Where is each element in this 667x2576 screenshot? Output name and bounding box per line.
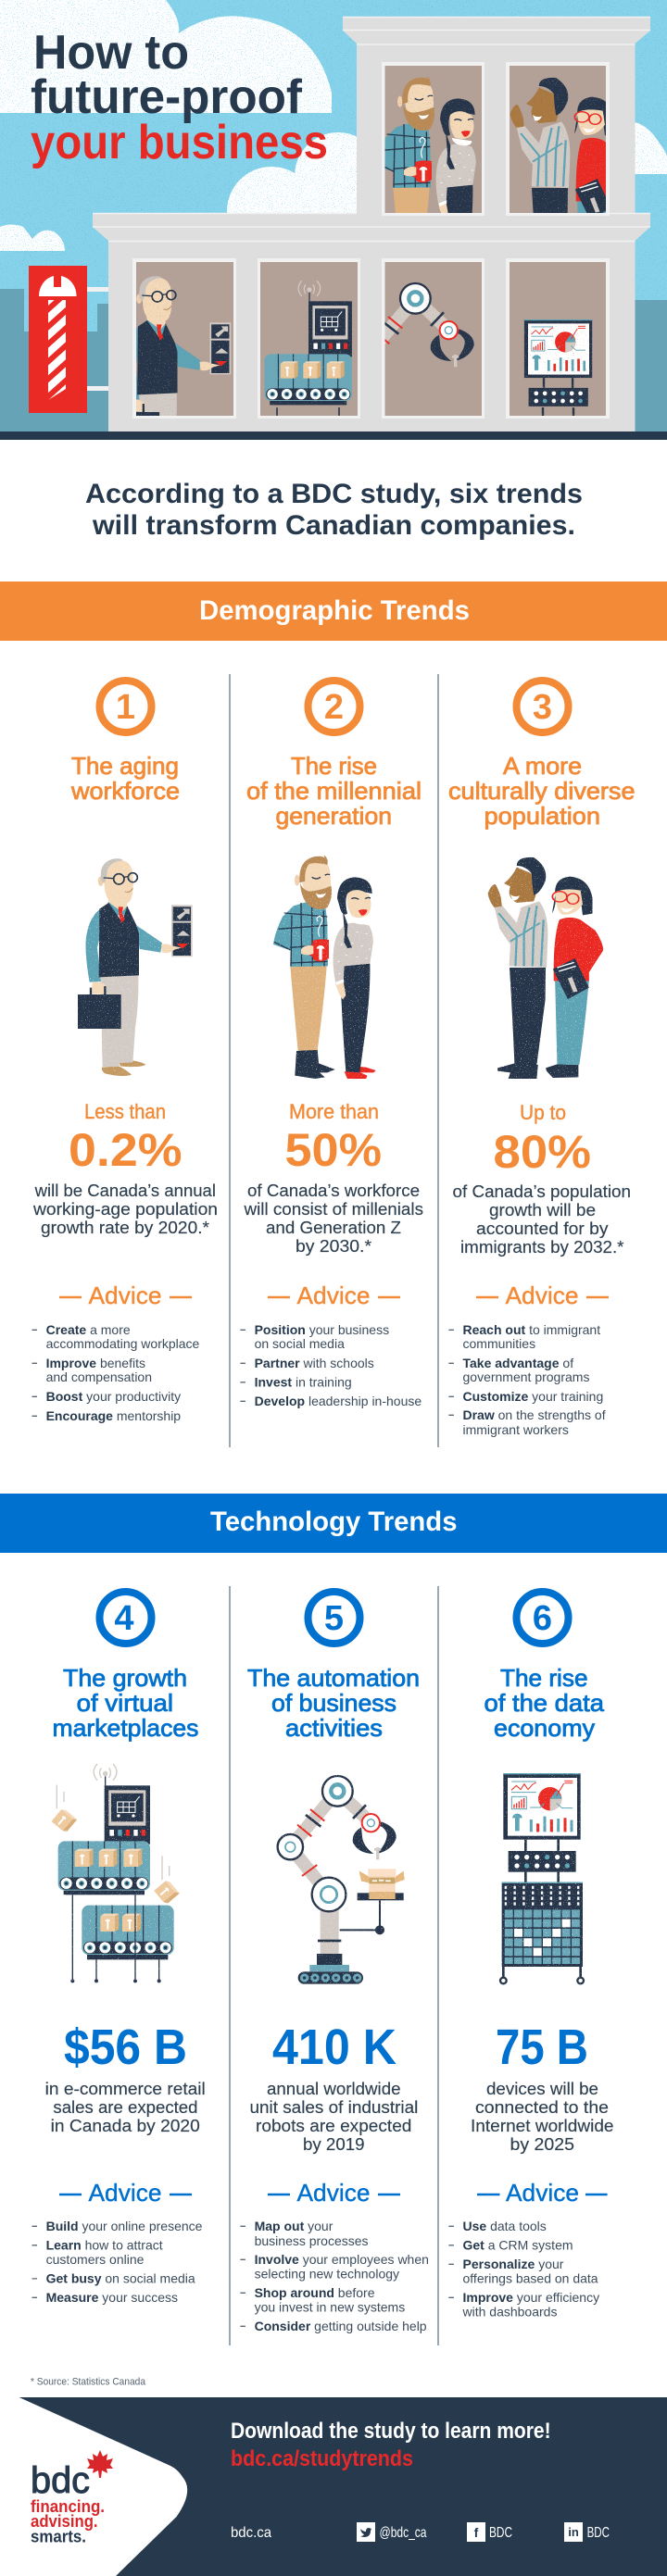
advice list: immigrant workers	[463, 1422, 569, 1437]
statistic: More than	[289, 1100, 379, 1123]
advice list: Partner with schools	[255, 1356, 374, 1370]
heading: workforce	[70, 777, 180, 805]
heading	[70, 752, 180, 805]
description: and Generation Z	[266, 1219, 401, 1237]
facebook link: f	[474, 2525, 479, 2540]
illustration: conveyors	[51, 1764, 180, 1982]
advice list: Position your business	[255, 1322, 389, 1337]
statistic	[285, 1100, 382, 1176]
advice heading: Advice	[296, 1282, 371, 1309]
statistic	[493, 1101, 591, 1178]
description: of Canada’s population	[452, 1182, 631, 1201]
advice list	[448, 2219, 599, 2320]
description	[250, 2080, 418, 2154]
number badge 1	[100, 681, 152, 732]
description: accounted for by	[476, 1219, 608, 1238]
description: sales are expected	[53, 2098, 198, 2117]
heading	[246, 752, 422, 830]
heading: The aging	[71, 752, 179, 780]
description: devices will be	[486, 2080, 598, 2098]
advice list: and compensation	[46, 1369, 152, 1384]
number badge 5	[308, 1592, 359, 1644]
number badge 4	[100, 1592, 152, 1644]
heading: activities	[285, 1714, 383, 1742]
description	[45, 2080, 206, 2135]
advice list: Get a CRM system	[463, 2237, 573, 2252]
advice list: business processes	[255, 2233, 369, 2248]
illustration: two colleagues	[488, 857, 603, 1079]
description: growth rate by 2020.*	[41, 1219, 209, 1237]
linkedin link: in	[568, 2525, 579, 2539]
statistic: 50%	[285, 1124, 382, 1176]
title: your business	[31, 116, 328, 169]
advice list: offerings based on data	[463, 2271, 598, 2286]
description: by 2019	[303, 2135, 365, 2154]
heading: The automation	[247, 1664, 420, 1692]
advice list: Draw on the strengths of	[463, 1407, 606, 1422]
advice list: with dashboards	[461, 2305, 557, 2320]
bdc logo: advising.	[31, 2512, 98, 2531]
number badge 6: 6	[533, 1599, 552, 1638]
advice list: Create a more	[46, 1322, 131, 1337]
advice list: on social media	[255, 1336, 345, 1351]
description: in e-commerce retail	[45, 2080, 206, 2098]
advice list: accommodating workplace	[46, 1336, 200, 1351]
screw sign	[29, 266, 108, 413]
description: robots are expected	[256, 2117, 411, 2135]
advice list: Use data tools	[463, 2219, 547, 2233]
statistic: 75 B	[496, 2020, 588, 2075]
panel: trend 1 aging workforce	[31, 681, 218, 1423]
statistic: Up to	[520, 1101, 566, 1124]
heading: of the data	[484, 1689, 605, 1717]
heading: of virtual	[77, 1689, 173, 1717]
illustration: data board and rack	[500, 1773, 584, 1983]
heading: culturally diverse	[448, 777, 636, 805]
bdc logo: smarts.	[31, 2528, 86, 2546]
hero illustration	[0, 0, 667, 440]
illustration: hipster couple	[273, 855, 376, 1079]
description: will be Canada’s annual	[34, 1182, 216, 1200]
advice list: Encourage mentorship	[46, 1408, 181, 1423]
footer	[19, 2397, 667, 2576]
intro statement: According to a BDC study, six trends	[85, 479, 583, 509]
advice list: Build your online presence	[46, 2219, 203, 2233]
window: hipster couple	[385, 76, 476, 213]
advice list	[448, 1322, 606, 1437]
linkedin link: BDC	[587, 2525, 610, 2541]
call to action	[231, 2419, 551, 2471]
source note: * Source: Statistics Canada	[31, 2377, 146, 2388]
advice list: communities	[463, 1336, 535, 1351]
advice heading: Advice	[89, 1282, 161, 1309]
panel: trend 2 millennials	[240, 681, 423, 1408]
advice list: Learn how to attract	[46, 2237, 163, 2252]
banner: technology trends	[0, 1494, 667, 1553]
advice heading: Advice	[296, 2179, 371, 2207]
window: data board	[524, 319, 592, 416]
skyline	[0, 289, 667, 431]
advice list: Take advantage of	[463, 1356, 573, 1370]
number badge 5: 5	[324, 1599, 344, 1638]
description	[243, 1182, 423, 1256]
advice heading: Advice	[506, 2179, 579, 2207]
call to action: Download the study to learn more!	[231, 2419, 551, 2444]
description	[452, 1182, 631, 1257]
advice list: selecting new technology	[255, 2267, 399, 2282]
window: older worker	[136, 276, 232, 416]
advice list	[31, 2219, 203, 2305]
facebook link	[467, 2522, 512, 2542]
number badge 6	[517, 1592, 569, 1644]
building	[93, 17, 650, 431]
heading: of the millennial	[246, 777, 422, 805]
advice list: Develop leadership in-house	[255, 1394, 422, 1408]
banner: demographic trends	[0, 581, 667, 641]
advice list: Boost your productivity	[46, 1389, 181, 1404]
description: in Canada by 2020	[51, 2117, 200, 2135]
advice list	[240, 1322, 422, 1408]
advice list: Invest in training	[255, 1374, 352, 1389]
advice list: Get busy on social media	[46, 2271, 195, 2286]
heading: The rise	[291, 752, 377, 780]
number badge 1: 1	[116, 688, 135, 727]
advice heading: Advice	[506, 1282, 578, 1309]
clouds	[0, 0, 667, 256]
heading	[52, 1664, 198, 1742]
description: by 2025	[510, 2135, 574, 2154]
twitter link	[357, 2522, 427, 2542]
heading: A more	[503, 752, 582, 780]
heading	[448, 752, 636, 830]
intro statement: will transform Canadian companies.	[92, 510, 575, 541]
title: future-proof	[31, 70, 303, 124]
panel: trend 6 data economy	[448, 1592, 613, 2320]
panel: trend 4 virtual marketplaces	[31, 1592, 206, 2305]
illustration: older worker	[78, 858, 193, 1076]
statistic: 0.2%	[69, 1124, 182, 1176]
advice list: Shop around before	[255, 2285, 375, 2300]
advice list: customers online	[46, 2252, 145, 2267]
advice list: Map out your	[255, 2219, 334, 2233]
banner: technology trends: Technology Trends	[210, 1507, 458, 1537]
description	[32, 1182, 218, 1237]
statistic	[69, 1100, 182, 1176]
intro statement	[85, 479, 583, 541]
number badge 3: 3	[533, 688, 552, 727]
window: robot arm	[385, 281, 474, 367]
panel: trend 3 culturally diverse population	[448, 681, 636, 1437]
window: two colleagues	[510, 78, 606, 213]
heading: of business	[271, 1689, 396, 1717]
heading: marketplaces	[52, 1714, 198, 1742]
panel: trend 5 automation	[240, 1592, 429, 2333]
call to action: bdc.ca/studytrends	[231, 2446, 413, 2471]
description: working-age population	[32, 1200, 218, 1219]
heading	[484, 1664, 605, 1742]
heading: generation	[276, 802, 392, 830]
advice list: Consider getting outside help	[255, 2319, 427, 2333]
heading: population	[484, 802, 600, 830]
heading	[247, 1664, 420, 1742]
description: connected to the	[475, 2098, 609, 2117]
heading: economy	[494, 1714, 595, 1742]
description: immigrants by 2032.*	[460, 1238, 624, 1257]
advice heading: Advice	[89, 2179, 161, 2207]
bdc logo: bdc	[31, 2460, 90, 2501]
advice list: you invest in new systems	[255, 2300, 405, 2315]
number badge 2: 2	[324, 688, 344, 727]
heading: The growth	[63, 1664, 187, 1692]
twitter link: @bdc_ca	[380, 2525, 427, 2541]
statistic: $56 B	[64, 2020, 187, 2075]
advice list	[31, 1322, 200, 1423]
bdc logo	[31, 2450, 113, 2546]
banner: demographic trends: Demographic Trends	[199, 595, 470, 626]
heading: The rise	[500, 1664, 587, 1692]
advice list: Measure your success	[46, 2290, 178, 2305]
window: conveyor	[265, 281, 352, 416]
description: Internet worldwide	[471, 2117, 613, 2135]
statistic: 410 K	[272, 2020, 396, 2075]
description: will consist of millenials	[243, 1200, 423, 1219]
description: unit sales of industrial	[250, 2098, 418, 2117]
linkedin link	[564, 2522, 610, 2542]
advice list: Personalize your	[463, 2257, 564, 2271]
statistic: Less than	[84, 1100, 166, 1123]
advice list: Customize your training	[463, 1389, 603, 1404]
description: of Canada’s workforce	[247, 1182, 420, 1200]
title: How to	[33, 26, 189, 80]
description: growth will be	[489, 1201, 596, 1219]
number badge 3	[517, 681, 569, 732]
bdc logo: financing.	[31, 2497, 105, 2516]
statistic: 80%	[493, 1126, 591, 1178]
website: bdc.ca	[231, 2525, 271, 2541]
advice list	[240, 2219, 429, 2333]
title	[31, 26, 328, 169]
advice list: Improve benefits	[46, 1356, 145, 1370]
advice list: Reach out to immigrant	[463, 1322, 600, 1337]
advice list: Involve your employees when	[255, 2252, 429, 2267]
number badge 2	[308, 681, 359, 732]
illustration: robot arm	[278, 1776, 405, 1984]
advice list: government programs	[463, 1369, 589, 1384]
description	[471, 2080, 613, 2154]
number badge 4: 4	[114, 1599, 134, 1638]
facebook link: BDC	[489, 2525, 512, 2541]
description: annual worldwide	[267, 2080, 400, 2098]
advice list: Improve your efficiency	[463, 2290, 599, 2305]
description: by 2030.*	[296, 1237, 371, 1256]
